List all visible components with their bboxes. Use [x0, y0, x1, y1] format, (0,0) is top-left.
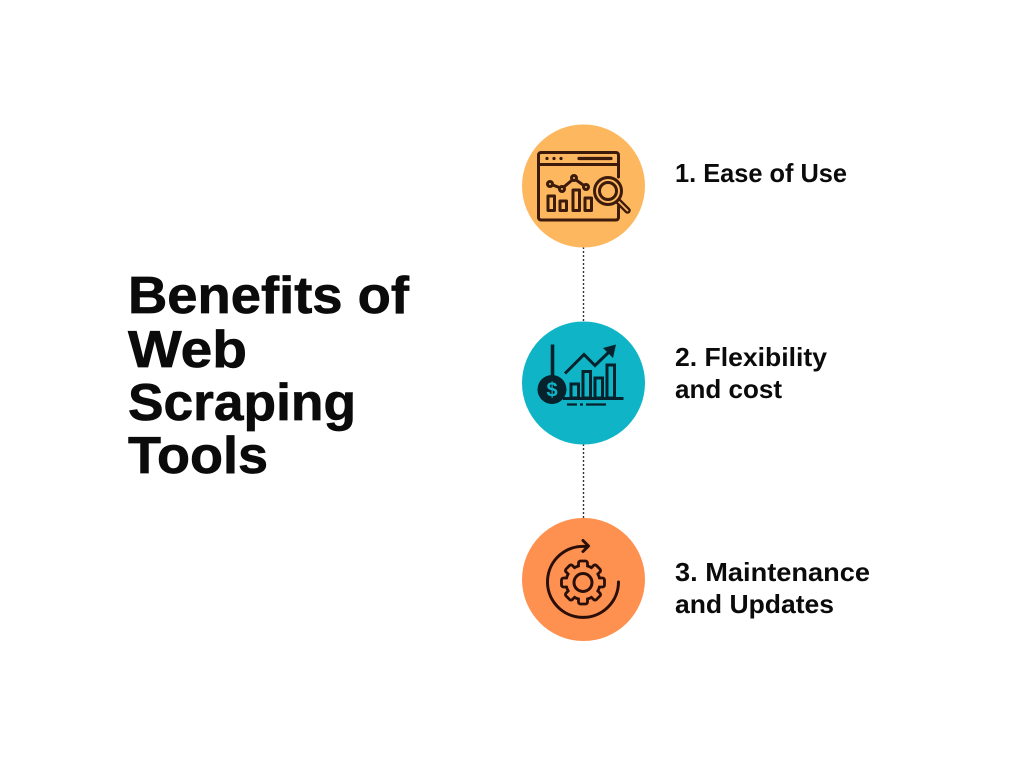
step 3 label: and Updates: [675, 589, 834, 619]
connector: step 2 to step 3: [582, 444, 584, 518]
title: [128, 267, 410, 485]
step 3 label: [675, 557, 870, 619]
connector: step 1 to step 2: [582, 247, 584, 321]
step 2 icon: growth chart with dollar coin: $: [546, 380, 558, 402]
title: Web: [128, 321, 247, 379]
step 2 icon: growth chart with dollar coin: [522, 322, 645, 444]
step 1 label: 1. Ease of Use: [675, 158, 847, 188]
title: Tools: [128, 427, 268, 485]
title: Scraping: [128, 374, 356, 432]
step 3 label: 3. Maintenance: [675, 557, 870, 587]
step 3 icon: gear with circular arrow: [522, 518, 645, 641]
title: Benefits of: [128, 267, 410, 325]
coin: [538, 375, 566, 404]
step 1 icon: analytics window with magnifier: [522, 124, 645, 248]
step 2 label: [675, 342, 828, 404]
step 2 label: and cost: [675, 374, 782, 404]
step 2 label: 2. Flexibility: [675, 342, 828, 372]
arrowhead: [603, 344, 616, 358]
